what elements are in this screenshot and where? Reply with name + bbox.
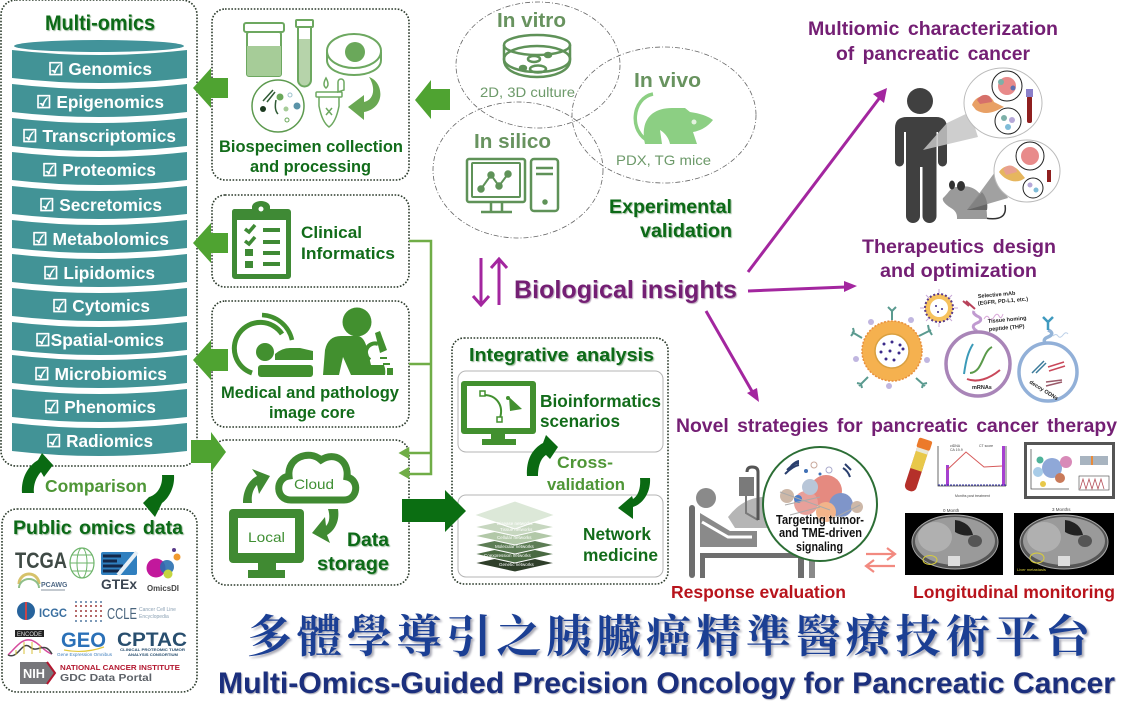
icon: network layers: Coexpression networks <box>484 553 532 558</box>
logo: TCGA: TCGA <box>15 548 67 573</box>
annotation: selective mAb: (EGFR, PD-L1, etc.) <box>978 297 1029 307</box>
logo: NIH GDC portal: GDC Data Portal <box>60 673 152 684</box>
arrow: multi-omics to storage <box>191 432 226 472</box>
arrow: clinical to multi-omics <box>193 223 228 263</box>
label: cross-validation: validation <box>547 475 625 494</box>
database cylinder: ☑ Cytomics <box>52 296 150 316</box>
ellipse: in vivo <box>572 47 756 183</box>
arrow: biospecimen to multi-omics <box>193 68 228 108</box>
heading: multiomic characterization: Multiomic characterization <box>808 18 1058 40</box>
heading: multi-omics: Multi-omics <box>45 12 155 35</box>
label: cross-validation: Cross- <box>557 453 613 472</box>
annotation: selective mAb <box>978 291 1029 307</box>
logo: CCLE: Encyclopedia <box>139 614 169 620</box>
logo: CPTAC: CPTAC <box>117 630 187 651</box>
database cylinder: ☑ Epigenomics <box>36 92 164 112</box>
database cylinder: ☑ Transcriptomics <box>22 126 176 146</box>
database cylinder: ☑ Genomics <box>48 59 152 79</box>
annotation: tissue homing peptide: peptide (THP) <box>989 324 1025 333</box>
panel: multi-omics <box>1 0 197 466</box>
arrow: storage to integrative analysis <box>402 490 466 532</box>
icon: magnifier cone mouse <box>967 172 1008 210</box>
ellipse: in silico <box>433 102 603 238</box>
logo: CCLE: Cancer Cell Line <box>139 607 176 613</box>
database cylinder: ☑ Microbiomics <box>34 364 167 384</box>
image: CT scan 0 month: 0 Month <box>943 508 960 513</box>
label: clinical informatics: Informatics <box>301 244 395 263</box>
arrow: to multiomic characterization <box>748 88 887 272</box>
label: network medicine: medicine <box>583 545 658 565</box>
icon: cloud: Cloud <box>294 476 334 492</box>
icon: tumor microenvironment circle: Targeting tumor- <box>776 513 864 527</box>
logo: GEO <box>57 629 113 658</box>
icon: magnifier cone human <box>923 112 978 150</box>
image: CT scan 3 months <box>1014 507 1114 575</box>
panel: biospecimen collection <box>212 9 409 180</box>
heading: therapeutics design <box>862 236 1056 282</box>
arrows: pink exchange <box>866 548 895 572</box>
logo: NIH GDC portal: NATIONAL CANCER INSTITUTE <box>60 665 180 672</box>
sub-panel: network medicine <box>458 495 663 577</box>
icon: imaging scanner <box>234 315 313 377</box>
icon: curved arrow <box>348 77 380 120</box>
heading: integrative analysis: Integrative analysis <box>469 344 654 365</box>
panel: data storage <box>212 440 409 585</box>
icon: mRNA liposome: mRNAs <box>972 385 992 391</box>
icon: culture dish <box>504 35 570 77</box>
database cylinder: ☑Spatial-omics <box>35 330 164 350</box>
heading: multiomic characterization: of pancreatic cancer <box>836 43 1030 65</box>
label: experimental validation: Experimental <box>609 196 732 218</box>
label: medical and pathology: Medical and pathology <box>221 384 400 402</box>
label: experimental validation <box>609 196 732 242</box>
icon: tumor microenvironment circle <box>763 447 877 561</box>
database cylinder: ☑ Secretomics <box>39 195 162 215</box>
label: biospecimen: and processing <box>250 158 371 176</box>
arrow: to therapeutics design <box>748 281 857 292</box>
label: data storage: storage <box>317 553 389 575</box>
panel: integrative analysis <box>452 338 668 584</box>
database cylinder <box>12 40 187 456</box>
label: cross-validation <box>547 453 625 494</box>
icon: pathologist with microscope <box>323 308 393 375</box>
icon: network layers: Molecular networks <box>495 544 535 549</box>
icon: decoy ODN liposome: decoy ODNs <box>1028 380 1059 402</box>
logo: GTEx: GTEx <box>101 576 137 592</box>
arrow: imaging to multi-omics <box>193 340 228 380</box>
arrow: comparison up <box>22 453 53 493</box>
icon: petri dish <box>327 34 381 75</box>
label: data storage <box>317 529 389 575</box>
panel: clinical informatics <box>212 195 409 287</box>
database cylinder: ☑ Metabolomics <box>32 229 169 249</box>
icon: decoy ODN liposome <box>1019 317 1077 402</box>
chart: ctDNA and CT score: CT score <box>979 444 993 448</box>
icon: small nanoparticle <box>920 289 958 327</box>
arrow: local to cloud <box>243 469 270 503</box>
icon: monitor <box>461 381 536 445</box>
label: response evaluation: Response evaluation <box>671 582 846 602</box>
arrow: to novel strategies <box>706 311 759 402</box>
icon: network layers: Cellular networks <box>497 535 532 540</box>
icon: cloud <box>279 455 356 500</box>
label: bioinformatics scenarios: Bioinformatics <box>540 391 661 411</box>
database cylinder: ☑ Proteomics <box>42 160 156 180</box>
icon: computer <box>467 159 558 212</box>
heading: multiomic characterization <box>808 18 1058 65</box>
bubble: mouse tumor detail <box>994 140 1060 202</box>
logo: PCAWG <box>19 574 68 591</box>
logo: GEO: GEO <box>61 629 106 652</box>
label: biospecimen <box>219 138 403 176</box>
icon: clipboard <box>232 201 291 279</box>
icon: microbiome circle <box>252 80 304 132</box>
icon: microtube <box>316 78 344 127</box>
title: chinese: 多體學導引之胰臟癌精準醫療技術平台 <box>247 612 1092 662</box>
annotation: tissue homing peptide: Tissue homing <box>988 316 1027 325</box>
logo: ENCODE: ENCODE <box>17 632 42 638</box>
chart: ctDNA and CT score: ctDNA <box>950 444 961 448</box>
label: clinical informatics <box>301 223 395 263</box>
icon: local monitor <box>229 509 304 578</box>
icon: blood collection tube <box>903 437 933 493</box>
heading: biological insights: Biological insights <box>514 276 737 304</box>
arrow: cross validation up <box>527 435 558 476</box>
icon: mRNA liposome <box>946 301 1010 396</box>
logo: GEO: Gene Expression Omnibus <box>57 652 113 658</box>
section: novel strategies <box>671 415 1117 602</box>
title: english: Multi-Omics-Guided Precision Oncology for Pancreatic Cancer <box>218 667 1115 700</box>
panel: experimental validation <box>433 2 756 242</box>
icon: local monitor: Local <box>248 529 285 545</box>
logo: ENCODE <box>8 630 52 656</box>
icon: network layers: Tissue networks <box>500 527 533 532</box>
annotation: selective mAb: Selective mAb <box>978 291 1016 300</box>
ellipse: in vitro: 2D, 3D culture <box>480 84 575 100</box>
label: network medicine: Network <box>583 524 651 544</box>
bubble: human tumor detail <box>964 68 1042 138</box>
arrow: comparison down <box>143 475 174 517</box>
heading: novel strategies: Novel strategies for pancreatic cancer therapy <box>676 415 1117 437</box>
label: medical and pathology <box>221 384 400 422</box>
label: comparison: Comparison <box>45 476 147 496</box>
arrow: cross validation down <box>618 478 650 519</box>
icon: test tube <box>296 20 313 86</box>
logo: NIH GDC portal: NIH <box>23 666 45 681</box>
label: experimental validation: validation <box>640 220 732 242</box>
heading: therapeutics design: and optimization <box>880 260 1037 282</box>
label: longitudinal monitoring: Longitudinal monitoring <box>913 582 1115 602</box>
icon: network layers: Disease networks <box>497 521 533 526</box>
logo: OmicsDI: OmicsDI <box>147 584 179 593</box>
icon: mouse <box>635 94 713 144</box>
database cylinder: ☑ Phenomics <box>44 397 156 417</box>
label: data storage: Data <box>347 529 389 551</box>
logo: ICGC: ICGC <box>39 606 67 620</box>
section: multiomic characterization <box>808 18 1060 223</box>
icon: network layers <box>474 501 555 572</box>
database cylinder: ☑ Lipidomics <box>43 263 155 283</box>
sub-panel: bioinformatics scenarios <box>458 371 663 452</box>
logo: ICGC <box>17 602 67 620</box>
ellipse: in vivo: PDX, TG mice <box>616 152 711 168</box>
icon: network layers: Genetic networks <box>499 562 535 567</box>
image: CT scan 0 month <box>905 508 1003 575</box>
logo: NIH GDC portal <box>20 662 180 684</box>
logo: CCLE: CCLE <box>107 606 137 623</box>
icon: tumor microenvironment circle: signaling <box>796 540 843 554</box>
logo: OmicsDI <box>146 548 180 593</box>
label: medical and pathology: image core <box>269 404 355 422</box>
ellipse: in vitro <box>456 2 620 128</box>
label: clinical informatics: Clinical <box>301 223 362 242</box>
label: bioinformatics scenarios <box>540 391 661 431</box>
image: CT scan 3 months: Liver metastasis <box>1017 567 1046 572</box>
chart: ctDNA and CT score <box>938 444 1006 498</box>
icon: tumor microenvironment circle: and TME-driven <box>779 526 862 540</box>
logo: PCAWG: PCAWG <box>41 582 68 589</box>
logo: GTEx <box>101 552 137 592</box>
chart: ctDNA and CT score: Months post treatment <box>955 494 990 498</box>
annotation: tissue homing peptide <box>988 316 1027 333</box>
chart: ctDNA and CT score: CA 19-9 <box>950 448 963 452</box>
icon: mouse <box>943 180 1005 219</box>
ellipse: in vivo: In vivo <box>634 69 701 92</box>
logo: TCGA <box>15 548 94 578</box>
panel: public omics data <box>2 509 197 692</box>
heading: therapeutics design: Therapeutics design <box>862 236 1056 258</box>
database cylinder: ☑ Radiomics <box>46 431 153 451</box>
label: network medicine <box>583 524 658 565</box>
image: CT scan 3 months: 3 Months <box>1052 507 1071 512</box>
label: bioinformatics scenarios: scenarios <box>540 411 620 431</box>
arrow: cloud to local <box>312 509 338 543</box>
arrow: validation to biospecimen <box>415 80 450 119</box>
ellipse: in vitro: In vitro <box>497 9 566 32</box>
label: biospecimen: Biospecimen collection <box>219 138 403 156</box>
heading: public omics data: Public omics data <box>13 517 183 539</box>
logo: CPTAC: CLINICAL PROTEOMIC TUMOR <box>120 647 185 652</box>
connector: clinical and imaging to storage <box>401 241 431 477</box>
icon: tablet single-cell view <box>1024 442 1115 499</box>
logo: CPTAC: ANALYSIS CONSORTIUM <box>128 652 179 657</box>
icon: patient in bed <box>689 467 815 578</box>
section: therapeutics design <box>851 236 1077 402</box>
icon: human figure <box>895 88 947 223</box>
icon: large nanoparticle <box>851 307 932 389</box>
panel: medical and pathology image core <box>212 301 409 427</box>
icon: specimen jar <box>244 23 284 76</box>
arrows: bidirectional insights <box>473 258 507 305</box>
logo: CCLE <box>75 602 176 623</box>
ellipse: in silico: In silico <box>474 130 551 153</box>
